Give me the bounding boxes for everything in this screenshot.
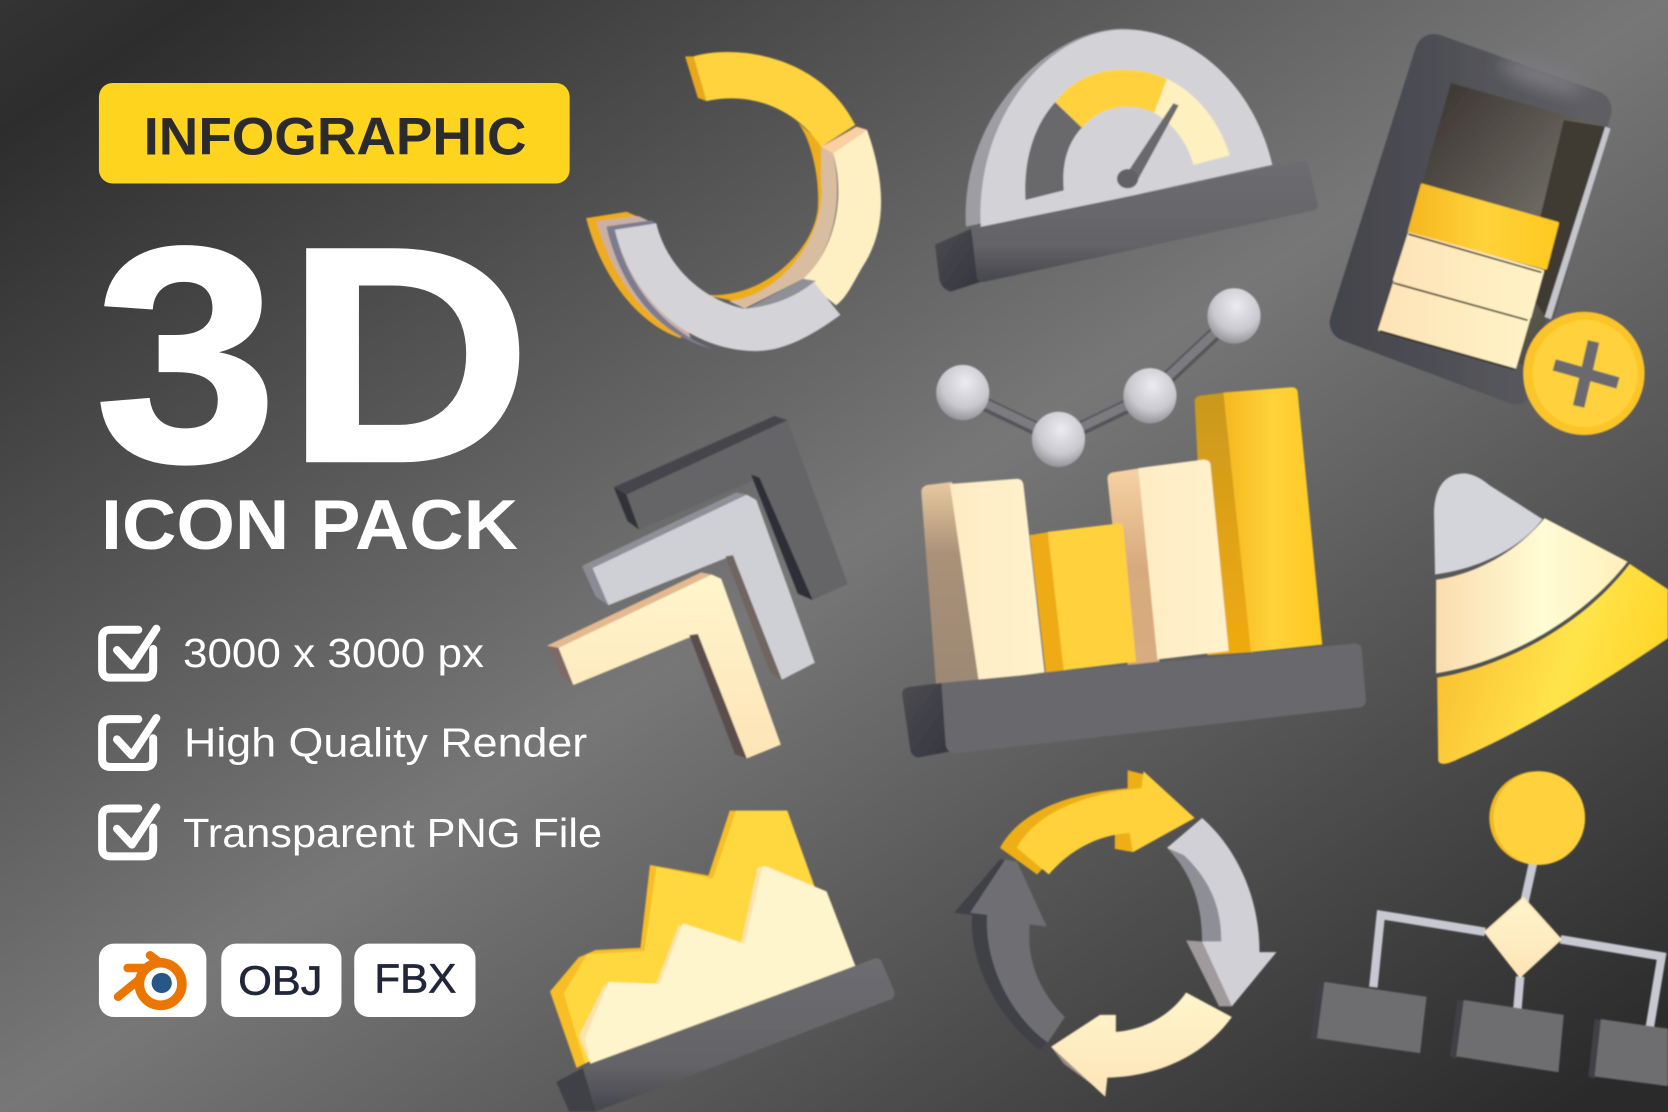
- icon: pyramid cone: [1434, 473, 1668, 764]
- badge: Blender logo: [99, 944, 206, 1017]
- icon: area chart: [550, 811, 895, 1112]
- badge: OBJ: OBJ: [238, 958, 322, 1004]
- arrow: gray: [1167, 818, 1277, 1006]
- badge: INFOGRAPHIC: INFOGRAPHIC: [144, 107, 527, 166]
- icon: battery with plus: [1349, 53, 1645, 435]
- icon: flowchart: [1311, 771, 1668, 1086]
- feature: Transparent PNG File: Transparent PNG File: [183, 810, 602, 856]
- title: 3D: D: [285, 184, 532, 526]
- title: 3D: 3: [95, 184, 278, 526]
- feature: High Quality Render: High Quality Render: [184, 719, 587, 765]
- flow box 3: [1588, 1019, 1668, 1086]
- icon: chevron pale: [547, 572, 781, 758]
- icon: cycle arrows: [954, 770, 1277, 1097]
- plus coin: [1523, 312, 1645, 435]
- feature: 3000 x 3000 px: 3000 x 3000 px: [183, 630, 484, 676]
- badge: FBX: FBX: [374, 956, 456, 1002]
- gauge base: [935, 161, 1318, 291]
- badge: FBX: [354, 944, 476, 1017]
- badge: OBJ: [221, 944, 341, 1017]
- badge: INFOGRAPHIC: [99, 83, 570, 184]
- icon: donut chart: [586, 52, 881, 351]
- title: 3D: [95, 184, 532, 526]
- icon: gauge meter: [935, 29, 1318, 291]
- chart base: [902, 643, 1366, 757]
- arrow: pale: [1051, 993, 1232, 1097]
- arrow: dark: [954, 860, 1065, 1050]
- area base: [556, 958, 895, 1112]
- icon: chevron gray: [582, 493, 815, 680]
- feature: 3000 x 3000 px: [102, 629, 484, 678]
- icon: chevron dark: [614, 416, 848, 600]
- flow box 2: [1450, 1000, 1564, 1072]
- flow box 1: [1311, 982, 1427, 1053]
- needle: [1117, 103, 1179, 188]
- icon: bar chart: [902, 387, 1366, 757]
- subtitle: ICON PACK: ICON PACK: [101, 485, 518, 564]
- icon: line graph nodes: [936, 288, 1261, 467]
- arrow: yellow: [1000, 770, 1195, 874]
